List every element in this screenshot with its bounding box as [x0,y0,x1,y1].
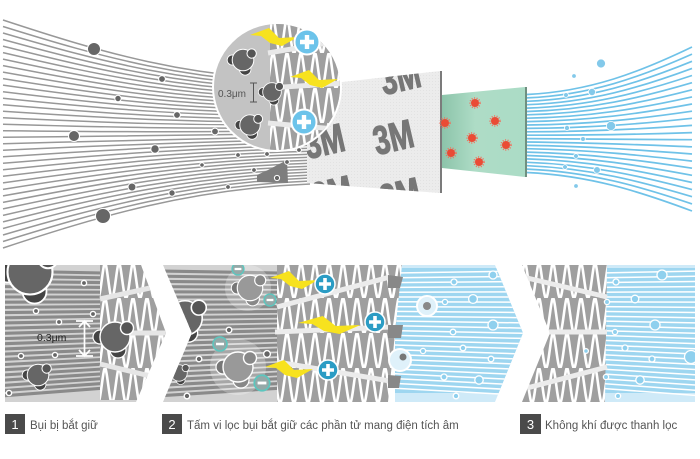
caption 3: Không khí được thanh lọc [545,420,677,432]
clean particles [584,270,698,399]
trapped dust and particles in clean zone [389,296,437,371]
green carbon filter [440,87,527,177]
dust clusters with halos [172,265,271,395]
caption 1 [5,414,98,434]
caption 2: 2 [168,417,176,432]
plus charges [292,30,320,134]
caption 3 [520,414,677,434]
filter mesh [520,265,607,402]
caption 1: 1 [11,417,19,432]
panel 3: purified air [520,260,700,405]
gray dust particles [68,42,301,224]
small particles [184,327,270,399]
filter mesh [275,265,403,402]
size marker: 0.3μm [218,89,246,100]
lightning bolts [265,271,360,378]
panel 2: filter charges capture dust [160,260,530,405]
white 3M filter plate [307,71,442,193]
blue clean zone [395,265,523,402]
magnified dust [227,49,283,139]
dust clusters [5,265,134,390]
caption 2 [162,414,459,434]
panel 1: dust captured [5,265,166,402]
3M logos: 3M [369,111,418,164]
size marker: 0.3μm [37,332,67,344]
3M logos: 3M [376,169,425,222]
magnifier circle [213,22,345,151]
3M logos: 3M [300,115,349,168]
clean blue airflow lines [527,47,692,211]
caption 2: Tấm vi lọc bụi bắt giữ các phần tử mang điện tích âm [187,419,459,432]
size marker [37,321,93,356]
3M logos [307,73,422,192]
small particles [6,280,96,396]
filter mesh [100,265,170,400]
mesh fragment behind plate [257,160,288,183]
plus charges [315,274,385,380]
caption 3: 3 [527,417,534,432]
gray dirty airflow lines [3,20,310,248]
red particles [440,98,511,167]
lightning bolts [250,28,338,88]
minus charges [213,263,276,391]
3M logos: 3M [308,167,357,220]
caption 1: Bụi bị bắt giữ [30,419,98,432]
3M logos: 3M [376,51,425,104]
blue clean particles [563,59,616,188]
